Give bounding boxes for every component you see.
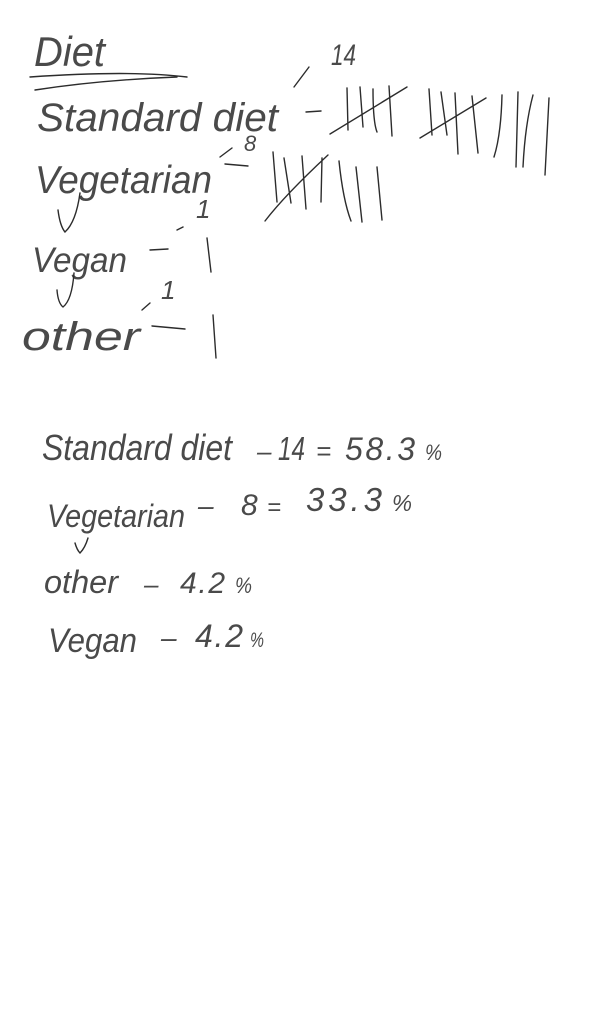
result: standard diet 58.3%: 58.3 (345, 431, 415, 467)
result: vegetarian 33.3%: 8 (241, 489, 258, 522)
result: standard diet 58.3%: = (316, 436, 331, 466)
tally row: vegetarian: Vegetarian (35, 159, 212, 202)
tally row: standard diet (37, 39, 549, 175)
title: Diet: Diet (34, 28, 107, 75)
result: standard diet 58.3%: % (425, 440, 442, 465)
result: standard diet 58.3%: Standard diet (42, 427, 234, 468)
tally row: standard diet: Standard diet (37, 96, 280, 140)
result: vegan 4.2%: Vegan (48, 622, 137, 660)
result: vegan 4.2%: % (250, 629, 264, 652)
result: vegetarian 33.3%: – (197, 490, 214, 521)
result: standard diet 58.3%: 14 (278, 430, 305, 467)
tally row: vegan (32, 194, 211, 307)
result: vegetarian 33.3% (47, 481, 412, 553)
tally row: vegetarian: 8 (244, 131, 257, 156)
result: vegan 4.2%: – (160, 622, 177, 653)
result: vegan 4.2% (48, 618, 264, 660)
tally row: standard diet: 14 (331, 39, 356, 72)
result: vegetarian 33.3%: = (267, 494, 281, 521)
result: other 4.2%: – (143, 569, 159, 599)
result: other 4.2%: % (235, 573, 252, 598)
result: other 4.2%: other (44, 564, 119, 600)
result: vegetarian 33.3%: 33.3 (306, 481, 383, 518)
tally row: vegan: 1 (196, 194, 210, 224)
result: other 4.2%: 4.2 (180, 567, 225, 600)
tally row: other: other (22, 315, 142, 359)
tally row: other: 1 (161, 275, 175, 305)
title: Diet (30, 28, 187, 90)
result: vegan 4.2%: 4.2 (195, 618, 243, 654)
result: vegetarian 33.3%: % (392, 490, 412, 516)
result: vegetarian 33.3%: Vegetarian (47, 498, 185, 534)
tally row: vegetarian (35, 131, 382, 232)
tally row: vegan: Vegan (32, 241, 127, 280)
tally row: other (22, 275, 216, 359)
result: standard diet 58.3%: – (256, 436, 272, 466)
